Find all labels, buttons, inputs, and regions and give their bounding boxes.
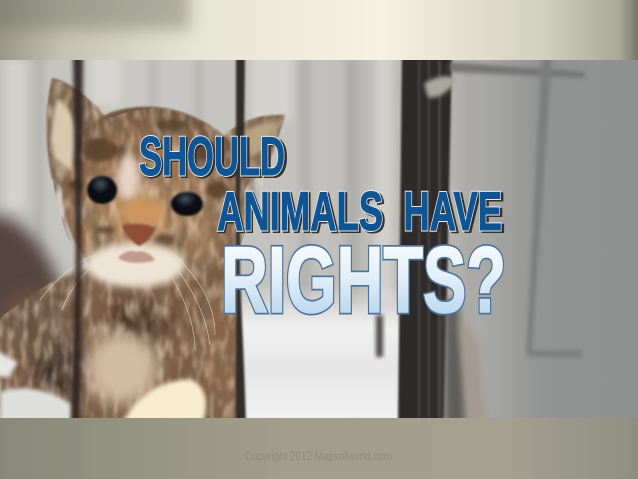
heading: RIGHTS? [221,227,506,332]
forehead markings [67,119,230,246]
icon: right eye [171,192,203,216]
heading: ANIMALS HAVE: ANIMALS HAVE [218,182,504,244]
title [139,125,506,332]
cage bar middle [236,55,246,425]
wall stripes [34,60,358,304]
floor [241,290,400,418]
right ear [222,115,285,195]
fur texture [0,70,290,420]
paw [122,380,206,425]
whiskers [40,255,215,350]
kitten body [0,262,243,425]
heading: RIGHTS?: RIGHTS? [221,227,506,332]
heading: SHOULD [139,125,288,188]
inner ear right [245,122,276,158]
chest fur [86,332,158,404]
heading: RIGHTS?: RIGHTS? [221,227,506,332]
heading: SHOULD: SHOULD [139,125,285,187]
icon: left eye [87,176,117,204]
copyright text: Copyright 2012 Mapsofworld.com [245,451,392,463]
latch highlight [424,76,456,98]
inner ear left [52,98,76,172]
bottom band [0,418,638,479]
cage post right [398,50,452,425]
blurred second kitten [0,214,62,340]
icon: nose [122,224,156,246]
top band [0,0,638,60]
mouth [118,251,155,263]
head [62,107,245,289]
heading: ANIMALS HAVE [217,180,504,244]
photo: kitten in cage [0,50,638,425]
heading: ANIMALS HAVE: ANIMALS HAVE [217,180,502,242]
heading: SHOULD: SHOULD [140,126,288,188]
background wall [0,60,638,418]
cage bar left [71,55,83,425]
heading: ANIMALS HAVE: ANIMALS HAVE [217,180,502,242]
heading: SHOULD: SHOULD [139,125,285,187]
blanket [0,388,72,425]
left ear [45,77,106,188]
face blaze and muzzle [117,154,139,202]
rear cage bars [450,62,585,78]
